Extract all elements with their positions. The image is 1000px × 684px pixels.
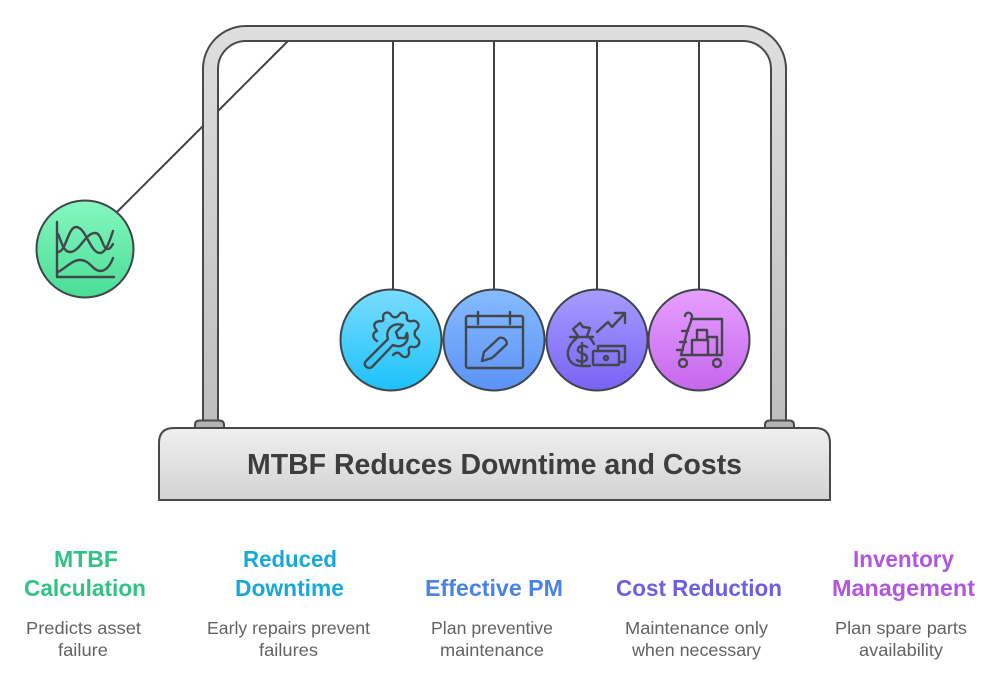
hanging strings xyxy=(393,41,699,290)
description: Maintenance only xyxy=(625,618,768,638)
description xyxy=(431,618,553,660)
ball: cost reduction, money bag and trend icon xyxy=(546,290,648,390)
description xyxy=(207,618,370,660)
description: Predicts asset xyxy=(26,618,141,638)
heading: MTBF xyxy=(54,546,118,572)
ball: MTBF calculation, chart icon xyxy=(36,200,134,298)
heading: Reduced xyxy=(243,546,337,572)
heading: Calculation xyxy=(24,575,146,601)
label: Reduced Downtime xyxy=(207,546,370,660)
description xyxy=(26,618,141,660)
description: maintenance xyxy=(440,640,544,660)
description xyxy=(625,618,768,660)
left foot xyxy=(195,420,224,428)
description: failures xyxy=(259,640,318,660)
heading: Management xyxy=(832,575,975,601)
label: MTBF Calculation xyxy=(24,546,146,660)
title: MTBF Reduces Downtime and Costs xyxy=(247,449,742,481)
heading: Downtime xyxy=(235,575,344,601)
heading xyxy=(235,546,344,601)
heading: Cost Reduction xyxy=(616,575,782,601)
ball: reduced downtime, wrench and gear icon xyxy=(340,290,442,390)
label: Inventory Management xyxy=(832,546,975,660)
frame: Newton's cradle arch xyxy=(203,26,786,421)
heading: Effective PM xyxy=(425,575,563,601)
description: availability xyxy=(859,640,943,660)
ball: effective PM, calendar and pencil icon xyxy=(444,290,544,390)
heading xyxy=(24,546,146,601)
label: Effective PM xyxy=(425,575,563,660)
label: Cost Reduction xyxy=(616,575,782,660)
ball: inventory management, cart icon xyxy=(648,290,750,390)
heading: Inventory xyxy=(853,546,954,572)
description: when necessary xyxy=(631,640,761,660)
heading xyxy=(832,546,975,601)
description xyxy=(835,618,967,660)
description: failure xyxy=(58,640,108,660)
right foot xyxy=(765,420,794,428)
description: Plan preventive xyxy=(431,618,553,638)
base panel with title xyxy=(159,428,830,500)
description: Plan spare parts xyxy=(835,618,967,638)
swinging string to raised ball xyxy=(116,41,288,213)
description: Early repairs prevent xyxy=(207,618,370,638)
